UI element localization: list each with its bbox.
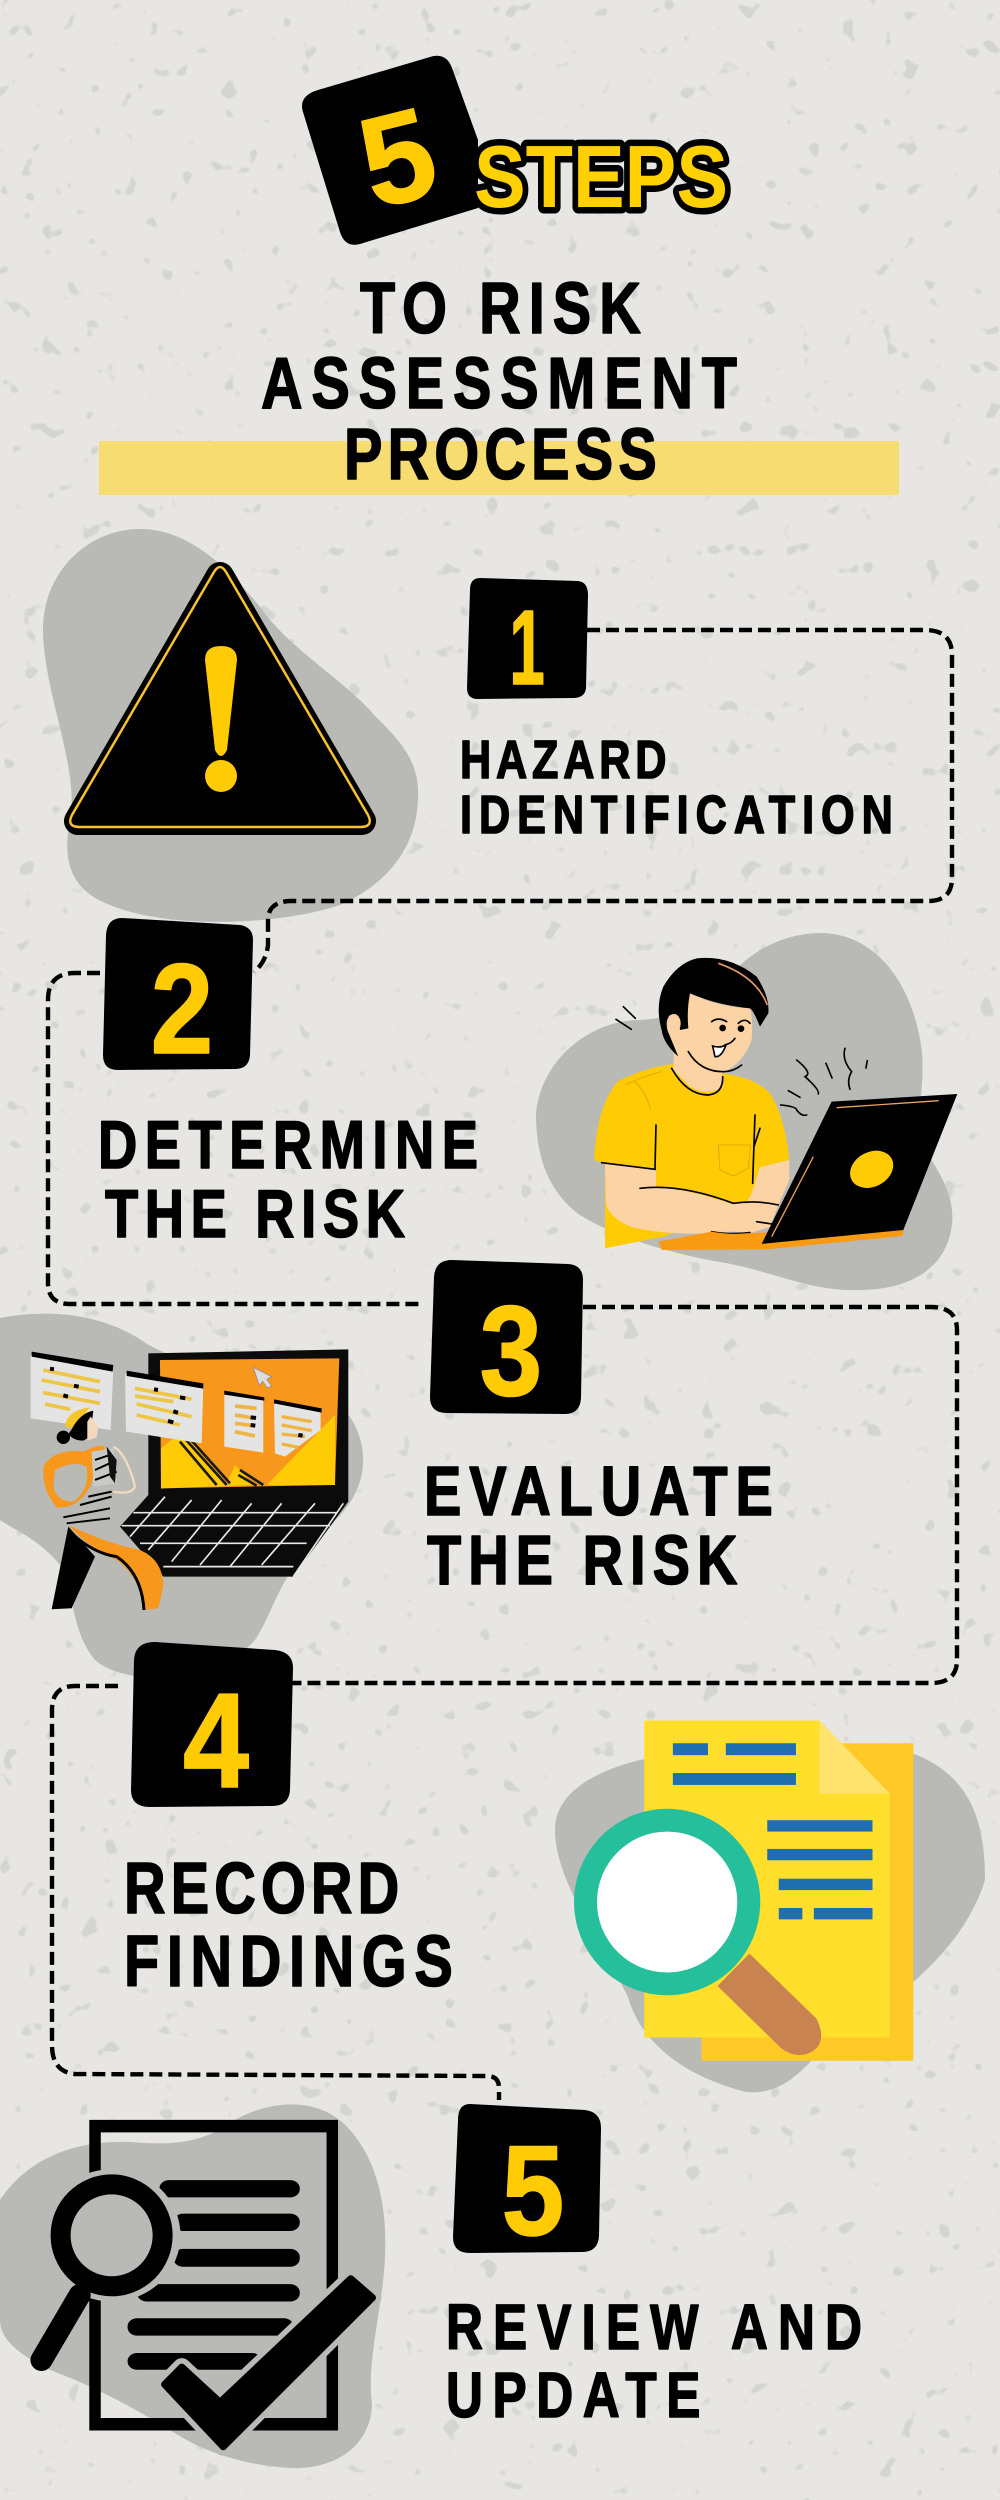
step 2 heading line 1: DETERMINE: [98, 1107, 478, 1183]
step 1: [460, 578, 893, 845]
step 4 heading line 1: RECORD: [124, 1848, 399, 1928]
step 1 number: 1: [509, 588, 545, 707]
step 2 heading line 2: THE RISK: [105, 1176, 405, 1252]
background blob: step 2: [536, 933, 952, 1290]
background blob: step 3: [0, 1314, 363, 1677]
step 4 number: 4: [183, 1665, 249, 1816]
title line: process: PROCESS: [344, 414, 657, 494]
dashed connector: step 4 to 5: [52, 1686, 499, 2100]
step 5: [446, 2104, 862, 2431]
step 2 number badge: [103, 918, 253, 1070]
background blob: step 5: [0, 2104, 385, 2468]
step 1 number badge: [467, 578, 588, 699]
step 5 heading line 1: REVIEW AND: [446, 2293, 862, 2363]
step 3 number: 3: [480, 1279, 542, 1423]
step 5 number badge: [453, 2104, 601, 2253]
step 3: [424, 1260, 773, 1599]
illustration: woman with laptop and data panels: [31, 1349, 348, 1610]
step 3 number badge: [430, 1260, 583, 1414]
illustration: documents under magnifying glass: [574, 1720, 913, 2061]
background blob: step 4: [555, 1748, 985, 2092]
background blob: step 1: [43, 529, 418, 922]
title block: [99, 56, 899, 495]
step 4: [124, 1642, 453, 2001]
title word STEPS: STEPS: [474, 127, 728, 226]
dashed connector: step 3 to 4: [292, 1307, 957, 1683]
title line: to risk: TO RISK: [360, 268, 641, 348]
step 2: [98, 918, 478, 1252]
step 3 heading line 1: EVALUATE: [424, 1453, 773, 1530]
step 4 number badge: [131, 1642, 293, 1807]
step 1 heading line 2: IDENTIFICATION: [460, 786, 893, 845]
title number badge: [302, 56, 478, 245]
step 4 heading line 2: FINDINGS: [124, 1921, 453, 2001]
icon: checklist document with magnifier and check mark: [41, 2120, 372, 2447]
dashed connector: step 2 to 3: [48, 973, 421, 1304]
highlight bar: [99, 441, 899, 495]
title line: assessment: ASSESSMENT: [261, 343, 737, 423]
step 3 heading line 2: THE RISK: [427, 1522, 738, 1599]
title number 5: 5: [346, 80, 450, 236]
icon: warning triangle: [70, 567, 370, 827]
dashed connector: step 1 to 2: [254, 630, 952, 972]
illustration: man at laptop: [594, 958, 957, 1250]
step 5 heading line 2: UPDATE: [446, 2361, 700, 2431]
step 5 number: 5: [502, 2119, 564, 2263]
step 1 heading line 1: HAZARD: [460, 731, 666, 790]
step 2 number: 2: [151, 937, 213, 1081]
